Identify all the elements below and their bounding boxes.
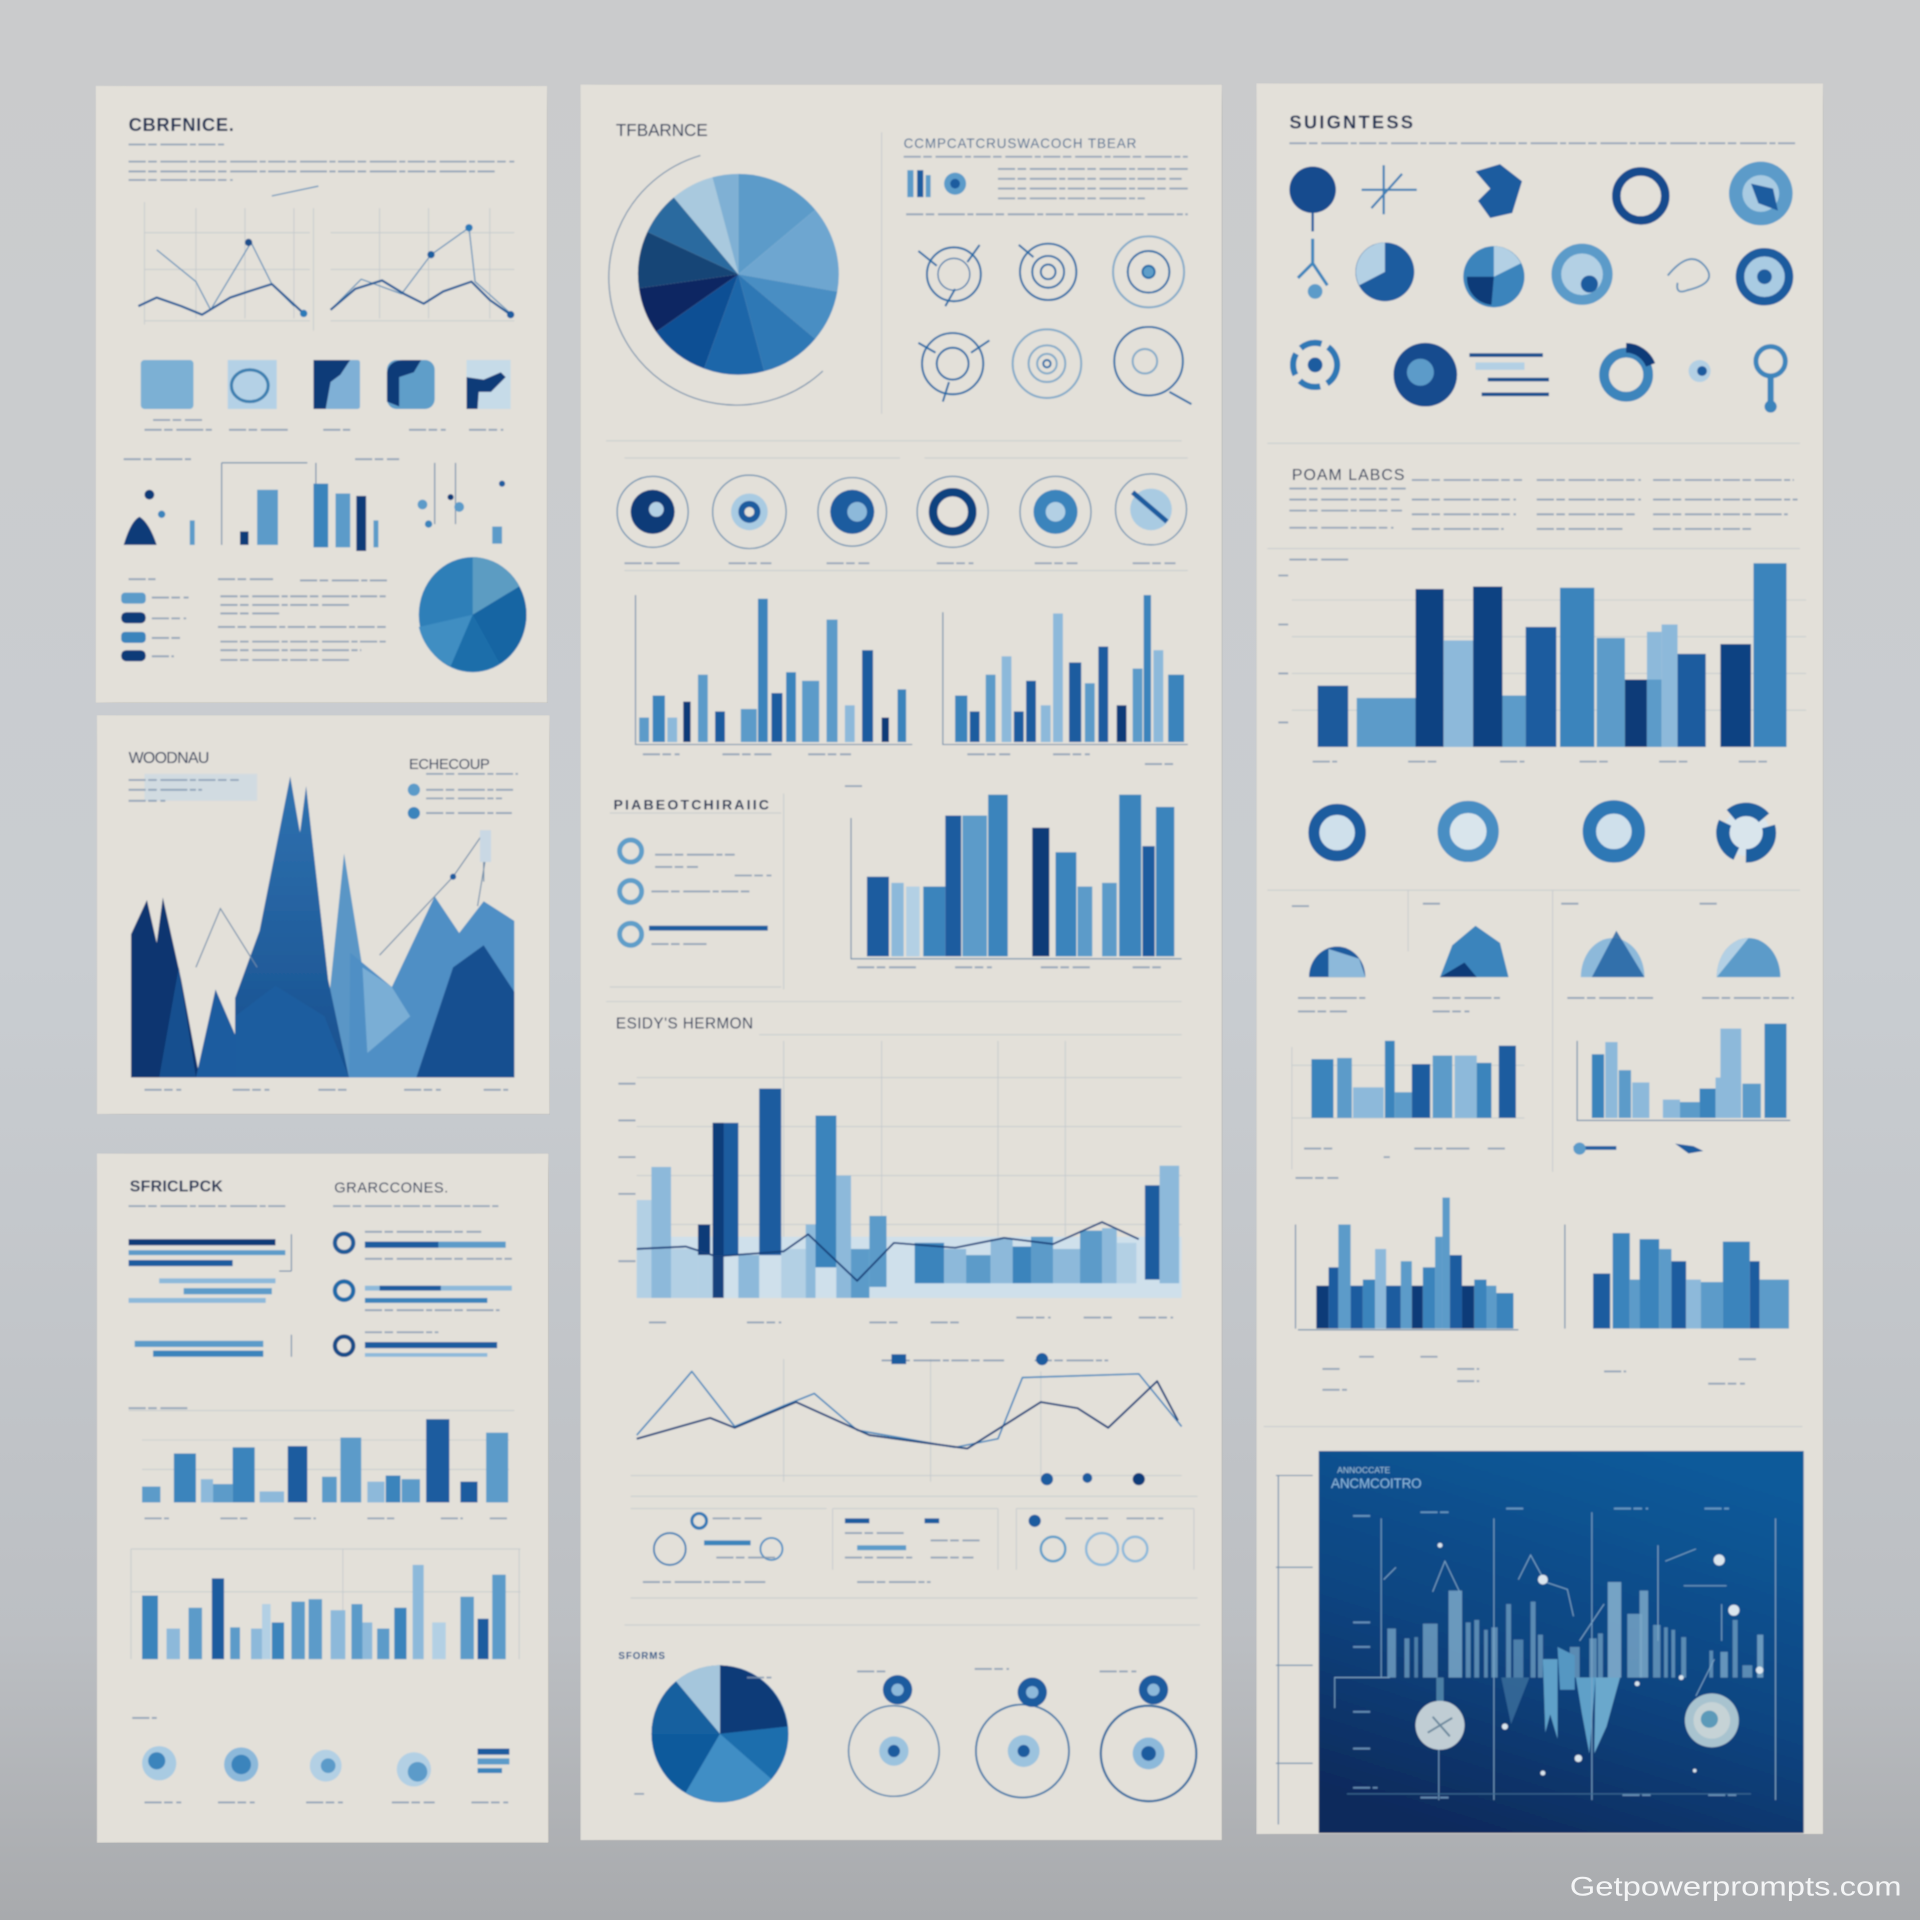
axis labels <box>144 1089 508 1091</box>
text <box>1289 142 1798 144</box>
orbit ring <box>609 156 823 405</box>
panel: center report <box>580 84 1222 1840</box>
watermark: Getpowerprompts.com <box>1570 1872 1902 1902</box>
heading: SFRICLPCK: SFRICLPCK <box>130 1178 223 1195</box>
data medallion right <box>1685 1693 1739 1747</box>
panel: top-left report <box>96 86 547 703</box>
ring progress rows <box>335 1232 512 1357</box>
panel: right report <box>1256 83 1823 1834</box>
legend left <box>129 774 257 801</box>
heading: WOODNAU: WOODNAU <box>129 750 209 767</box>
thin connector lines and dots <box>1335 1512 1776 1800</box>
donut row <box>1267 807 1800 1172</box>
ring row <box>617 458 1188 571</box>
bar chart: pair right <box>1573 1024 1790 1155</box>
bar chart: pair left <box>636 595 912 744</box>
bar chart: skyline left <box>1296 1178 1518 1390</box>
icon captions <box>144 420 503 430</box>
big pie chart <box>638 174 839 375</box>
legend pills <box>121 579 189 661</box>
heading: TFBARNCE: TFBARNCE <box>616 120 708 140</box>
text block: intro <box>129 144 514 180</box>
label: SFORMS: SFORMS <box>618 1651 665 1662</box>
heading: GRARCCONES: GRARCCONES. <box>334 1181 448 1197</box>
bar chart: upper <box>129 1408 514 1502</box>
heading small: ANNOCCATE <box>1337 1465 1391 1475</box>
heading: chart summary: CCMPCATCRUSWACOCH TBEAR <box>904 136 1137 151</box>
text block: notes <box>218 579 389 660</box>
heading: SUIGNTESS: SUIGNTESS <box>1289 112 1413 133</box>
dome icons <box>1298 926 1794 1011</box>
heading: PIABEOTCHIRAIIC: PIABEOTCHIRAIIC <box>613 796 769 812</box>
bar chart: pair left <box>1292 1041 1524 1169</box>
mixed chart row <box>124 459 505 551</box>
legend right <box>408 774 518 819</box>
bar chart: main <box>1278 560 1806 762</box>
line chart wide <box>631 1353 1182 1485</box>
bar chart: skyline right <box>1565 1224 1789 1384</box>
title: CBRFNICE: CBRFNICE. <box>129 114 234 135</box>
line chart: right <box>313 208 514 331</box>
heading: ANCMCOITRO <box>1331 1476 1422 1491</box>
pie chart <box>419 557 527 672</box>
data medallion left <box>1416 1701 1464 1750</box>
ring icons row 2 <box>1298 239 1789 307</box>
panel: bottom-left report <box>97 1153 549 1843</box>
concentric ring icons <box>918 236 1191 404</box>
ring icons row 1 <box>1289 162 1793 231</box>
line chart: left <box>138 186 318 324</box>
ring icons row 3 <box>1293 343 1785 413</box>
axis labels <box>643 754 1176 764</box>
heading: POAM LABCS: POAM LABCS <box>1292 467 1404 484</box>
downward teal shapes <box>1436 1647 1620 1753</box>
bar chart: grouped <box>845 786 1182 967</box>
mini bars and text <box>904 157 1188 214</box>
chart labels <box>144 1517 509 1519</box>
panel: mountain chart <box>97 715 550 1114</box>
text columns <box>1289 480 1798 529</box>
dark panel text labels <box>1353 1509 1740 1798</box>
panel: dark dashboard <box>1319 1451 1804 1833</box>
network circles <box>634 1669 1196 1801</box>
text <box>129 1205 498 1207</box>
list with rings <box>610 793 784 989</box>
large combo chart <box>618 1041 1182 1322</box>
bar chart: pair right <box>943 595 1188 744</box>
pie chart: bottom <box>651 1665 789 1802</box>
side axis ticks <box>1276 1476 1313 1824</box>
heading: ECHECOUP: ECHECOUP <box>409 757 490 773</box>
icons: five square tiles <box>141 360 511 409</box>
area chart: peaks <box>131 776 514 1078</box>
horizontal bars <box>129 1234 291 1357</box>
small rings row <box>132 1718 509 1802</box>
skyline bars <box>1387 1582 1763 1678</box>
bar chart: lower <box>131 1549 520 1659</box>
process boxes <box>631 1496 1198 1598</box>
heading: ESIDY'S HERMON: ESIDY'S HERMON <box>616 1016 753 1033</box>
